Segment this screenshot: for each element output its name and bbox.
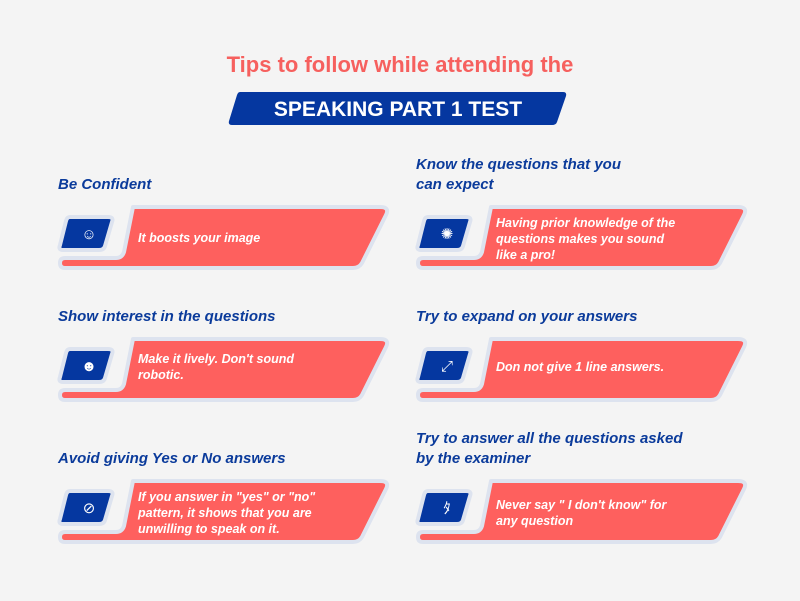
tip: know questions: questions makes you sound (496, 232, 664, 246)
banner (229, 92, 566, 125)
tip: answer all: Never say " I don't know" for (496, 498, 668, 512)
tip: avoid yes no (57, 450, 387, 542)
tip: know questions: ✺ (441, 226, 453, 243)
tip: answer all (416, 430, 745, 542)
tip: know questions: can expect (416, 176, 495, 193)
tip: avoid yes no: Avoid giving Yes or No answers (57, 450, 286, 467)
tip: avoid yes no: ⊘ (83, 500, 95, 517)
tip: show interest: robotic. (138, 368, 184, 382)
tip: answer all: ﾀ (443, 500, 451, 517)
tip: answer all: by the examiner (416, 450, 531, 467)
tip: expand (416, 308, 745, 400)
tip: be confident: Be Confident (58, 176, 152, 193)
tip: know questions (416, 156, 745, 268)
tip: avoid yes no: unwilling to speak on it. (138, 522, 280, 536)
tip: show interest: ☻ (81, 358, 97, 375)
tip: answer all: any question (496, 514, 573, 528)
tip: avoid yes no: pattern, it shows that you are (137, 506, 312, 520)
tip: expand: Don not give 1 line answers. (496, 360, 664, 374)
tip: avoid yes no: If you answer in "yes" or "no" (138, 490, 316, 504)
banner: SPEAKING PART 1 TEST (274, 98, 522, 121)
tip: answer all: Try to answer all the questions asked (416, 430, 683, 447)
tip: show interest: Make it lively. Don't sound (138, 352, 294, 366)
tip: be confident: ☺ (81, 226, 97, 243)
tip: know questions: Having prior knowledge of the (496, 216, 675, 230)
tip: know questions: Know the questions that you (416, 156, 621, 173)
tip: show interest: Show interest in the questions (58, 308, 276, 325)
tip: be confident (58, 176, 387, 268)
tip: expand: Try to expand on your answers (416, 308, 637, 325)
tip: know questions: like a pro! (496, 248, 555, 262)
tip: be confident: It boosts your image (138, 231, 260, 245)
tip: expand: ⤢ (441, 358, 454, 375)
title: Tips to follow while attending the (227, 52, 573, 77)
tip: show interest (58, 308, 387, 400)
